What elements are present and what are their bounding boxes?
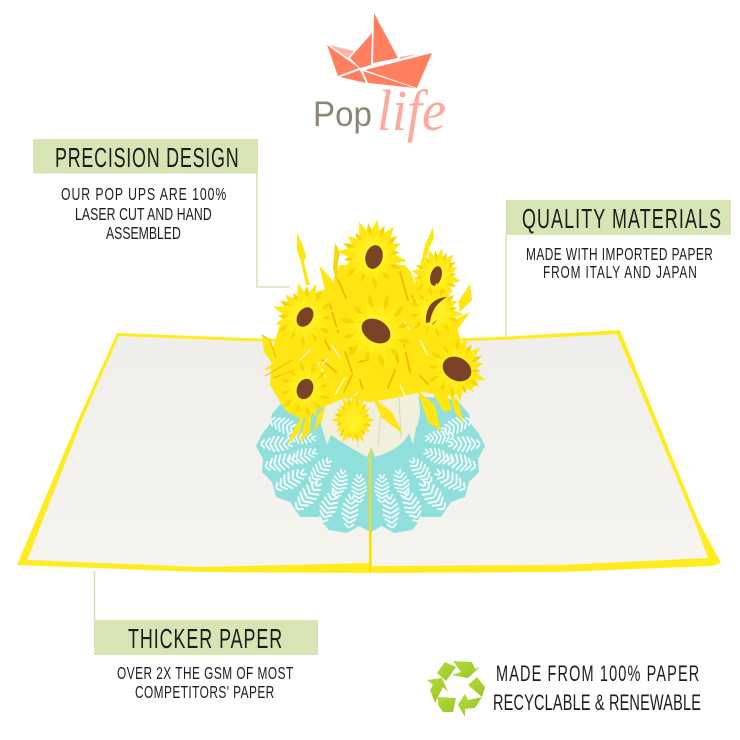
wordmark: Pop: Pop [313, 95, 372, 134]
heading: THICKER PAPER [128, 623, 282, 654]
sunflower: right middle [399, 277, 469, 346]
description: FROM ITALY AND JAPAN [543, 263, 697, 283]
heading: PRECISION DESIGN [55, 142, 239, 173]
sunflower: lower left [270, 351, 341, 425]
sunflower: upper right [403, 239, 470, 311]
text: made from 100% paper: RECYCLABLE & RENEWABLE [493, 690, 701, 715]
heading bar [94, 620, 318, 655]
callout: thicker paper [94, 620, 318, 703]
bouquet foliage [262, 227, 478, 445]
heading bar [506, 200, 731, 235]
icon: recycle symbol [427, 661, 485, 717]
callout leader lines [94, 172, 506, 621]
sunflower bouquet [259, 210, 501, 447]
sunflower: centre [327, 281, 426, 379]
logo: Poplife [313, 13, 446, 143]
lower leaves [287, 415, 304, 445]
heading: QUALITY MATERIALS [522, 203, 721, 234]
bouquet cut-outs [300, 270, 428, 402]
callout: precision design [33, 139, 258, 244]
description [61, 185, 227, 244]
panel: open card [17, 330, 721, 573]
callout: quality materials [506, 200, 731, 283]
text: made from 100% paper: MADE FROM 100% PAPER [496, 661, 699, 686]
card yellow edge [17, 330, 721, 573]
sunflower: left [259, 269, 352, 363]
description: COMPETITORS' PAPER [135, 683, 274, 703]
bouquet shading [262, 272, 428, 392]
icon: origami boat [327, 13, 432, 88]
sunflower: lower centre [330, 391, 377, 447]
card right page [372, 334, 708, 566]
wordmark: life: life [377, 78, 446, 143]
description [526, 245, 713, 283]
sunflower: right [410, 322, 501, 414]
description: ASSEMBLED [106, 224, 181, 244]
description: OUR POP UPS ARE 100% [61, 185, 227, 205]
sunflower: top [329, 210, 416, 300]
heading bar [33, 139, 258, 174]
description: OVER 2X THE GSM OF MOST [117, 664, 293, 684]
card left page [27, 336, 369, 567]
doily [256, 397, 485, 572]
description: LASER CUT AND HAND [75, 205, 212, 225]
description [117, 664, 293, 703]
description: MADE WITH IMPORTED PAPER [526, 245, 713, 265]
vase [321, 386, 420, 457]
text: made from 100% paper [493, 661, 701, 715]
